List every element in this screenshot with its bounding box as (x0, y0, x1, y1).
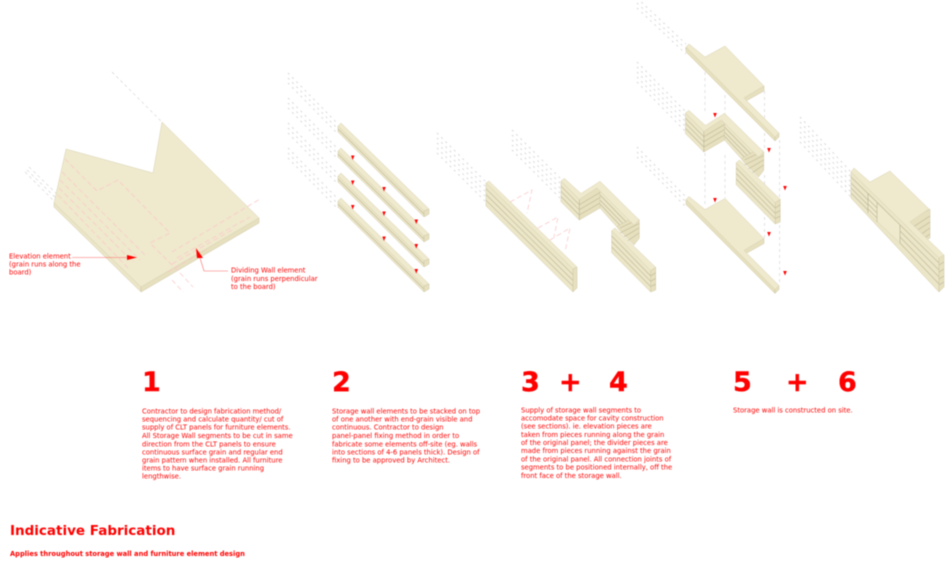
label: dividing wall element: to the board) (231, 283, 276, 291)
step 5 + 6 number: + (786, 367, 809, 398)
panel 3: wall segments (437, 130, 656, 292)
step 5 + 6 (733, 367, 857, 414)
step 2 text: fixing to be approved by Architect. (332, 457, 450, 465)
step 5 + 6 text: Storage wall is constructed on site. (733, 406, 853, 414)
bottom plate (686, 196, 779, 294)
panel 1: CLT panel with cutting pattern (9, 72, 318, 292)
label: dividing wall element: Dividing Wall element (231, 266, 306, 274)
step 2 text (332, 407, 480, 465)
board 3 (338, 173, 429, 267)
guide lines behind panel (25, 72, 162, 201)
step 3 + 4 (521, 367, 672, 480)
step 3 + 4 number: 3 (521, 367, 540, 398)
step 3 + 4 text: (see sections). ie. elevation pieces are (521, 422, 652, 430)
step 2 text: Storage wall elements to be stacked on top (332, 407, 480, 415)
step 2 text: of one another with end-grain visible and (332, 416, 472, 424)
step 3 + 4 text: front face of the storage wall. (521, 472, 622, 480)
step 1 text: direction from the CLT panels to ensure (142, 440, 276, 448)
straight elevation wall (486, 181, 577, 292)
label: dividing wall element (231, 266, 318, 291)
red arrows (713, 113, 787, 276)
stipple fields (437, 130, 561, 203)
step 3 + 4 text: Supply of storage wall segments to (521, 406, 641, 414)
arrow: elevation element (72, 255, 137, 260)
stipple fields (288, 73, 338, 209)
step 1 text: supply of CLT panels for furniture elements. (142, 424, 290, 432)
dashed vertical guides (705, 72, 780, 285)
step 5 + 6 number: 6 (838, 367, 857, 398)
step 3 + 4 text: taken from pieces running along the grain (521, 431, 664, 439)
title: Indicative Fabrication (10, 523, 175, 539)
panel 5: assembled wall (800, 117, 944, 292)
step 3 + 4 text (521, 406, 672, 480)
label: dividing wall element: (grain runs perpendicular (231, 275, 318, 283)
board 4 (338, 198, 429, 292)
step 5 + 6 number (733, 367, 857, 398)
label: elevation element: (grain runs along the (9, 260, 81, 268)
label: elevation element: board) (9, 268, 32, 276)
step 1 text: All Storage Wall segments to be cut in same (142, 432, 293, 440)
middle layered wall (686, 110, 780, 224)
step 2 text: fabricate some elements off-site (eg. walls (332, 440, 478, 448)
step 5 + 6 number: 5 (733, 367, 752, 398)
step 3 + 4 text: made from pieces running against the grain (521, 447, 671, 455)
step 1 text: lengthwise. (142, 473, 181, 481)
step 1 text (142, 407, 293, 481)
label: elevation element: Elevation element (9, 252, 71, 260)
step 2 text: into sections of 4-6 panels thick). Design of (332, 449, 480, 457)
pink connection lines (510, 190, 570, 252)
label: elevation element (9, 252, 81, 276)
CLT panel board (54, 122, 259, 292)
stipple fields (637, 0, 686, 207)
step 3 + 4 text: of the original panel. All connection joints of (521, 456, 672, 464)
red arrows (351, 156, 418, 274)
step 3 + 4 number: 4 (609, 367, 628, 398)
step 1 text: continuous surface grain and regular end (142, 449, 283, 457)
stipple field (800, 117, 851, 197)
top plate (686, 44, 779, 141)
step 2 text: panel-panel fixing method in order to (332, 432, 459, 440)
step 3 + 4 number (521, 367, 628, 398)
step 1 text: sequencing and calculate quantity/ cut of (142, 416, 284, 424)
step 3 + 4 text: of the original panel; the divider pieces are (521, 439, 668, 447)
zigzag divider wall (561, 178, 656, 292)
step 1 (142, 367, 293, 481)
step 2 (332, 367, 480, 465)
step 2 number: 2 (332, 367, 351, 398)
step 1 text: items to have surface grain running (142, 465, 264, 473)
step 3 + 4 text: segments to be positioned internally, off the (521, 464, 672, 472)
board 1 (338, 123, 429, 217)
step 1 number: 1 (142, 367, 161, 398)
board 2 (338, 148, 429, 242)
red cutting lines (58, 159, 260, 292)
step 3 + 4 text: accomodate space for cavity construction (521, 414, 664, 422)
step 1 text: Contractor to design fabrication method/ (142, 407, 282, 415)
panel 4: exploded assembly (637, 0, 787, 294)
assembled storage wall (851, 168, 944, 292)
arrow: dividing wall element (196, 248, 228, 271)
step 3 + 4 number: + (559, 367, 582, 398)
subtitle: Applies throughout storage wall and furniture element design (10, 550, 245, 558)
step 1 text: grain pattern when installed. All furniture (142, 457, 282, 465)
step 2 text: continuous. Contractor to design (332, 424, 444, 432)
panel 2: stacked boards (288, 73, 429, 292)
